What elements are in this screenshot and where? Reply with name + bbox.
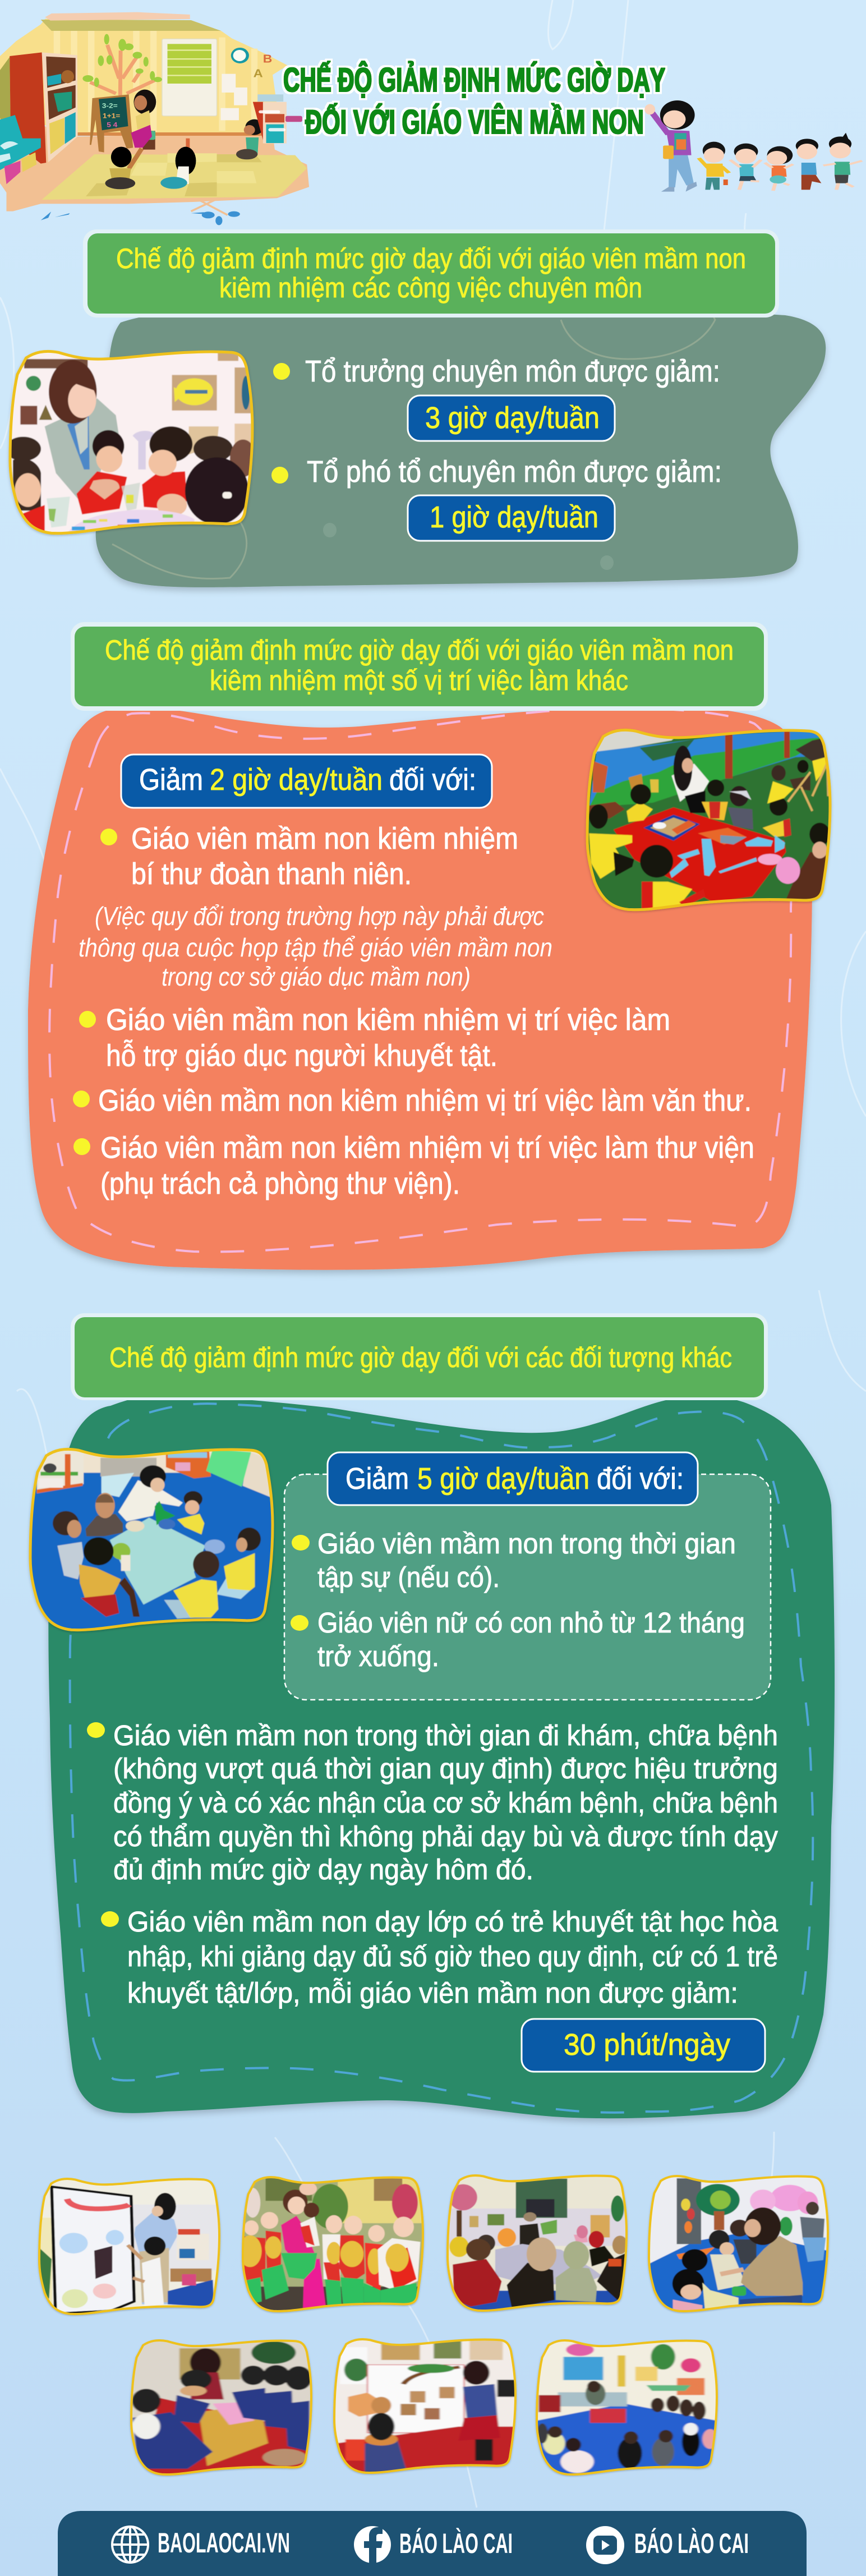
heading bar 3 [71, 1313, 768, 1400]
bullet: deputy team leader: Tổ phó tổ chuyên môn được giảm: [307, 455, 722, 489]
bullet: inclusive class: nhập, khi giảng dạy đủ số giờ theo quy định, cứ có 1 trẻ [127, 1940, 778, 1972]
illustration: teacher and children [644, 100, 862, 192]
dashed box: reduce 5 hours list [284, 1452, 771, 1700]
facebook label: BÁO LÀO CAI [399, 2528, 513, 2559]
youtube label: BÁO LÀO CAI [634, 2528, 749, 2559]
photo 1: teacher and boy at whiteboard [37, 2178, 221, 2317]
heading bar 1: kiêm nhiệm các công việc chuyên môn [219, 272, 642, 303]
heading bar 1: Chế độ giảm định mức giờ dạy đối với giáo viên mầm non [116, 243, 746, 274]
bullet: probation [292, 1528, 736, 1593]
section 1: specialist duties [6, 229, 826, 587]
bullet: inclusive class: Giáo viên mầm non dạy lớp có trẻ khuyết tật học hòa [127, 1906, 779, 1938]
badge: reduce 2 hours: Giảm [139, 763, 203, 797]
bullet: library: Giáo viên mầm non kiêm nhiệm vị trí việc làm thư viện [100, 1131, 754, 1165]
badge: 3 hours per week [408, 395, 615, 441]
bullet: library [73, 1131, 754, 1200]
section 2: other positions [28, 622, 830, 1270]
bullet: medical leave: có thẩm quyền thì không phải dạy bù và được tính dạy [113, 1820, 778, 1852]
bullet: youth union secretary: Giáo viên mầm non kiêm nhiệm [131, 822, 518, 855]
title illustration: classroom: 1+1= [103, 112, 120, 119]
bullet: disability support [79, 1003, 670, 1073]
bullet: inclusive class: khuyết tật/lớp, mỗi giáo viên mầm non được giảm: [127, 1977, 738, 2009]
bullet: young child: Giáo viên nữ có con nhỏ từ 12 tháng [317, 1607, 745, 1639]
bullet: library: (phụ trách cả phòng thư viện). [100, 1167, 460, 1200]
badge: 1 hour per week: 1 giờ dạy/tuần [430, 500, 598, 534]
note: conversion conditions [79, 901, 552, 991]
icon: globe [112, 2527, 148, 2563]
section 3: other subjects [30, 1313, 835, 2118]
badge: 3 hours per week: 3 giờ dạy/tuần [425, 401, 600, 435]
badge: 1 hour per week [408, 495, 615, 541]
photo 7: children in a circle on blue floor [535, 2339, 719, 2477]
panel: other positions [28, 707, 812, 1270]
title illustration: classroom: 5 4 [107, 121, 118, 128]
badge: reduce 5 hours [328, 1452, 698, 1505]
badge: 30 minutes per day [522, 2019, 765, 2072]
badge: reduce 2 hours: 2 giờ dạy/tuần [210, 763, 383, 797]
bullet: youth union secretary [100, 822, 518, 891]
photo 2: children in traditional costume [241, 2176, 425, 2313]
badge: reduce 2 hours [121, 755, 492, 808]
bullet: young child [291, 1607, 745, 1672]
heading bar 2: kiêm nhiệm một số vị trí việc làm khác [210, 665, 628, 696]
website label: BAOLAOCAI.VN [158, 2527, 290, 2559]
badge: reduce 5 hours: Giảm [346, 1462, 409, 1496]
title illustration: classroom: A [254, 67, 263, 80]
photo: teacher with children and cups [7, 350, 255, 537]
panel: other subjects [48, 1395, 835, 2118]
heading bar 2: Chế độ giảm định mức giờ dạy đối với giáo viên mầm non [105, 634, 734, 666]
badge: reduce 2 hours: đối với: [389, 763, 476, 797]
heading bar 3: Chế độ giảm định mức giờ dạy đối với các đối tượng khác [109, 1342, 732, 1373]
bullet: inclusive class [101, 1906, 779, 2009]
bullet: medical leave [87, 1719, 778, 1885]
title: ĐỐI VỚI GIÁO VIÊN MẦM NON [305, 103, 644, 141]
heading bar 1 [83, 229, 779, 318]
badge: 30 minutes per day: 30 phút/ngày [564, 2028, 730, 2062]
note: conversion conditions: (Việc quy đổi trong trường hợp này phải được [95, 901, 544, 931]
bullet: young child: trở xuống. [317, 1640, 439, 1672]
photo: toddlers around table with teacher [27, 1447, 275, 1633]
photo 4: teacher and toddlers drinking [647, 2175, 830, 2313]
badge: reduce 5 hours: đối với: [597, 1462, 684, 1496]
bullet: clerical: Giáo viên mầm non kiêm nhiệm vị trí việc làm văn thư. [98, 1084, 752, 1117]
bullet: medical leave: (không vượt quá thời gian quy định) được hiệu trưởng [113, 1752, 778, 1784]
bullet: youth union secretary: bí thư đoàn thanh niên. [131, 857, 412, 891]
photo 6: children at decorated wall [332, 2338, 517, 2475]
title [283, 61, 665, 141]
footer [58, 2511, 807, 2576]
bullet: disability support: hỗ trợ giáo dục người khuyết tật. [106, 1039, 498, 1073]
photo: children crafting on red table [584, 728, 833, 913]
panel: specialist duties [96, 305, 826, 587]
note: conversion conditions: trong cơ sở giáo dục mầm non) [162, 962, 471, 991]
badge: reduce 5 hours: 5 giờ dạy/tuần [417, 1462, 589, 1496]
title illustration: classroom [0, 12, 309, 225]
title illustration: classroom: 3-2= [102, 102, 118, 109]
note: conversion conditions: thông qua cuộc họp tập thể giáo viên mầm non [79, 933, 552, 962]
bullet: team leader: Tổ trưởng chuyên môn được giảm: [305, 355, 720, 388]
title: CHẾ ĐỘ GIẢM ĐỊNH MỨC GIỜ DẠY [283, 61, 665, 99]
bullet: probation: Giáo viên mầm non trong thời gian [317, 1528, 736, 1560]
bullet: medical leave: Giáo viên mầm non trong thời gian đi khám, chữa bệnh [113, 1719, 778, 1751]
bullet: probation: tập sự (nếu có). [317, 1561, 500, 1593]
photo 5: children with teacher at low table [129, 2339, 313, 2477]
heading bar 2 [71, 622, 768, 711]
title illustration: classroom: B [263, 53, 272, 65]
bullet: disability support: Giáo viên mầm non kiêm nhiệm vị trí việc làm [106, 1003, 670, 1037]
bullet: medical leave: đồng ý và có xác nhận của cơ sở khám bệnh, chữa bệnh [113, 1787, 778, 1819]
photo gallery [39, 2175, 828, 2475]
icon: facebook [354, 2526, 391, 2564]
bullet: medical leave: đủ định mức giờ dạy ngày hôm đó. [113, 1853, 533, 1885]
photo 3: children in winter coats [445, 2174, 628, 2313]
icon: youtube [586, 2526, 624, 2564]
